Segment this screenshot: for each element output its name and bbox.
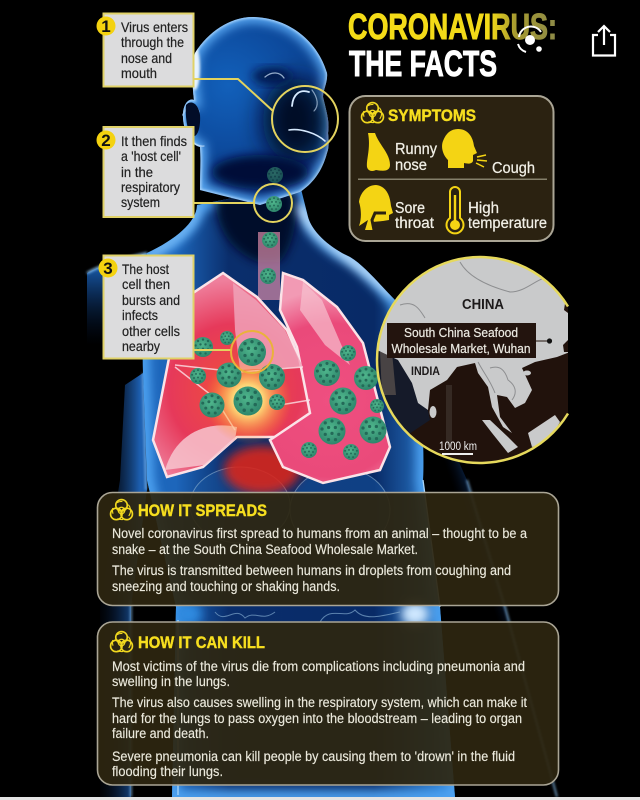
title: CORONAVIRUS: bbox=[348, 6, 557, 47]
market location label bbox=[387, 323, 552, 358]
callout 3 bbox=[98, 256, 194, 358]
runny nose label: Runny bbox=[395, 141, 437, 158]
callout 2: It then finds bbox=[121, 133, 187, 149]
left arm bbox=[100, 373, 147, 797]
market location label: South China Seafood bbox=[404, 326, 518, 340]
callout 3: infects bbox=[122, 307, 158, 323]
label: China: CHINA bbox=[462, 297, 504, 313]
panel: symptoms: throat bbox=[395, 215, 435, 232]
callout 2: in the bbox=[121, 164, 153, 180]
body text: Novel coronavirus first spread to humans from an animal – thought to be a bbox=[112, 526, 527, 541]
human figure bbox=[87, 17, 557, 797]
map: China locator bbox=[376, 256, 569, 464]
icon: nose bbox=[367, 133, 390, 171]
body text: snake – at the South China Seafood Wholesale Market. bbox=[112, 542, 418, 557]
callout 1: through the bbox=[121, 34, 184, 50]
body text: The virus is transmitted between humans in droplets from coughing and bbox=[112, 563, 511, 578]
title bbox=[348, 6, 557, 84]
body text bbox=[112, 659, 527, 779]
callout 3: nearby bbox=[122, 338, 160, 354]
divider bbox=[358, 178, 547, 180]
body text bbox=[112, 526, 527, 594]
label: India: INDIA bbox=[411, 366, 440, 378]
callout connector lines and circles bbox=[193, 79, 338, 373]
body text: hard for the lungs to pass oxygen into the bloodstream – leading to organ bbox=[112, 711, 522, 726]
callout 3: bursts and bbox=[122, 292, 180, 308]
panel: how it spreads bbox=[98, 492, 558, 606]
icon: biohazard bbox=[111, 500, 132, 520]
icon: coughing head bbox=[442, 129, 487, 168]
right arm bbox=[430, 420, 557, 797]
market location label: Wholesale Market, Wuhan bbox=[392, 342, 531, 356]
heading: HOW IT SPREADS bbox=[138, 501, 267, 520]
callout 2: respiratory bbox=[121, 179, 180, 195]
scale bar: 1000 km bbox=[439, 441, 477, 453]
left lung bbox=[153, 273, 317, 477]
body text: Severe pneumonia can kill people by causing them to 'drown' in the fluid bbox=[112, 749, 515, 764]
icon: loading overlay bbox=[518, 26, 542, 52]
body text: swelling in the lungs. bbox=[112, 674, 230, 689]
callout 2: system bbox=[121, 194, 160, 210]
callout 2: 2 bbox=[101, 131, 111, 150]
panel: how it can kill bbox=[98, 622, 558, 785]
callout 3: 3 bbox=[103, 259, 113, 278]
icon: thermometer bbox=[446, 187, 464, 233]
head bbox=[183, 17, 329, 205]
high temperature label: High bbox=[468, 200, 499, 217]
body text: Most victims of the virus die from complications including pneumonia and bbox=[112, 659, 525, 674]
land bbox=[377, 250, 575, 433]
callout 3: other cells bbox=[122, 323, 180, 339]
callout 3: The host bbox=[122, 261, 169, 277]
body text: sneezing and touching or shaking hands. bbox=[112, 579, 340, 594]
icon: biohazard bbox=[111, 632, 132, 652]
symptoms heading: SYMPTOMS bbox=[388, 106, 476, 125]
callout 2 bbox=[96, 127, 194, 217]
abdominal organs bbox=[190, 467, 400, 622]
icon: sore throat head bbox=[359, 185, 393, 230]
callout 1: Virus enters bbox=[121, 19, 188, 35]
callout 1: 1 bbox=[101, 17, 111, 36]
panel: symptoms: temperature bbox=[468, 215, 547, 232]
sea bbox=[378, 352, 568, 462]
body text: The virus also causes swelling in the respiratory system, which can make it bbox=[112, 695, 527, 710]
panel: symptoms: nose bbox=[395, 157, 427, 174]
right lung bbox=[270, 273, 390, 483]
body text: failure and death. bbox=[112, 726, 209, 741]
callout 1: nose and bbox=[121, 50, 172, 66]
face detail bbox=[183, 73, 325, 146]
title: THE FACTS bbox=[349, 43, 497, 84]
lungs bbox=[153, 232, 390, 494]
sore throat label: Sore bbox=[395, 200, 425, 217]
virus particles bbox=[190, 167, 386, 460]
callout 2: a 'host cell' bbox=[121, 148, 181, 164]
left shoulder bbox=[87, 253, 147, 373]
callout 1 bbox=[96, 14, 194, 86]
callout 1: mouth bbox=[121, 65, 157, 81]
icon: share bbox=[593, 26, 615, 56]
body text: flooding their lungs. bbox=[112, 764, 223, 779]
heading: HOW IT CAN KILL bbox=[138, 633, 265, 652]
cough label: Cough bbox=[492, 160, 535, 177]
panel: symptoms bbox=[350, 96, 554, 241]
icon: biohazard bbox=[362, 103, 383, 123]
callout 3: cell then bbox=[122, 276, 170, 292]
torso and neck bbox=[143, 185, 455, 797]
